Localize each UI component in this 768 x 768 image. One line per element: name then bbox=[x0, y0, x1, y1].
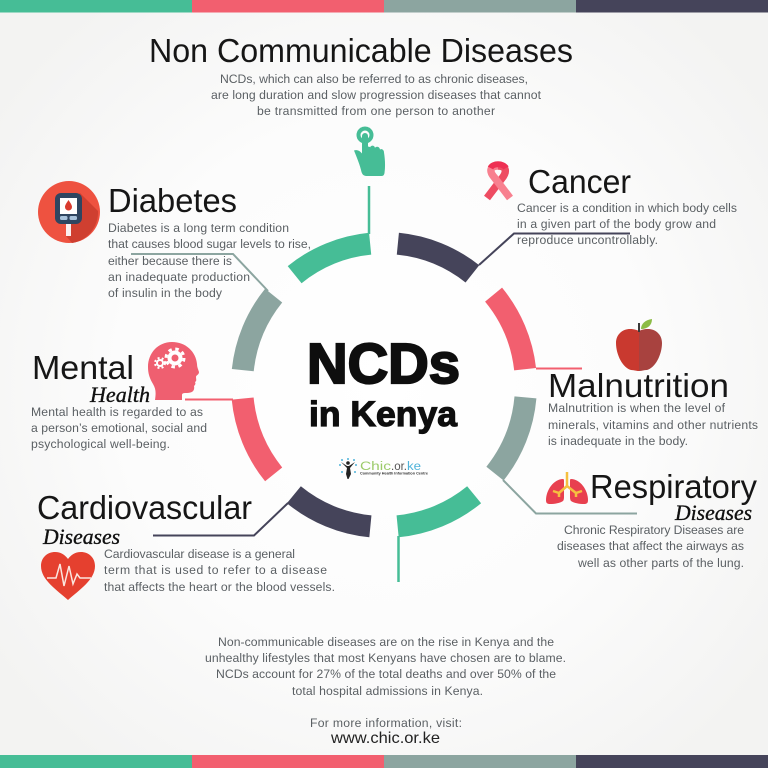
text: respiratory description bbox=[557, 523, 744, 570]
text: cardiovascular description: term that is used to refer to a disease bbox=[104, 563, 327, 577]
intro text: are long duration and slow progression diseases that cannot bbox=[211, 88, 542, 102]
website link text: www.chic.or.ke bbox=[330, 730, 440, 747]
logo: Chic.or.ke: .or. bbox=[391, 461, 407, 473]
text: cancer description bbox=[517, 201, 737, 247]
text: cardiovascular description: that affects the heart or the blood vessels. bbox=[104, 580, 335, 594]
heading: Malnutrition: Malnutrition bbox=[548, 367, 729, 404]
heading: Cancer: Cancer bbox=[528, 163, 631, 200]
title: Non Communicable Diseases bbox=[149, 32, 573, 69]
text: respiratory description: diseases that affect the airways as bbox=[557, 539, 744, 553]
text: mental health description bbox=[31, 405, 207, 451]
centre heading bbox=[307, 332, 460, 434]
text: diabetes description: an inadequate production bbox=[108, 270, 250, 284]
closing text: NCDs account for 27% of the total deaths and over 50% of the bbox=[216, 667, 556, 681]
connector lines bbox=[131, 186, 637, 582]
closing text: unhealthy lifestyles that most Kenyans have chosen are to blame. bbox=[205, 651, 566, 665]
text: respiratory description: Chronic Respiratory Diseases are bbox=[564, 523, 744, 537]
heading: Mental: Mental bbox=[32, 349, 134, 386]
text: respiratory description: well as other parts of the lung. bbox=[577, 556, 744, 570]
text: diabetes description: of insulin in the body bbox=[108, 286, 223, 300]
text: malnutrition description: Malnutrition is when the level of bbox=[548, 401, 726, 415]
icon: heart with pulse bbox=[41, 552, 95, 600]
icon: pointing hand bbox=[354, 128, 385, 176]
text: diabetes description: Diabetes is a long term condition bbox=[108, 221, 289, 235]
centre heading: NCDs bbox=[307, 332, 460, 396]
icon: ribbon bbox=[487, 164, 510, 198]
icon: lungs bbox=[546, 472, 588, 504]
panel: malnutrition bbox=[548, 319, 758, 448]
text: mental health description: a person’s emotional, social and bbox=[31, 421, 207, 435]
text: diabetes description: that causes blood sugar levels to rise, bbox=[108, 237, 311, 251]
text: cancer description: reproduce uncontrollably. bbox=[517, 233, 658, 247]
text: cancer description: Cancer is a condition in which body cells bbox=[517, 201, 737, 215]
text: diabetes description: either because there is bbox=[108, 254, 232, 268]
icon: apple bbox=[616, 319, 662, 371]
closing text: Non-communicable diseases are on the rise in Kenya and the bbox=[218, 635, 554, 649]
ring chart with six disease segments bbox=[184, 185, 584, 585]
panel: diabetes bbox=[38, 181, 311, 300]
icon: head with gears bbox=[148, 342, 199, 400]
heading: Respiratory: Respiratory bbox=[590, 468, 757, 505]
panel: respiratory bbox=[546, 468, 757, 570]
text: mental health description: psychological well-being. bbox=[31, 437, 170, 451]
script label: Diseases: Diseases bbox=[42, 524, 120, 549]
logo: Chic.or.ke: Community Health Information Centre bbox=[360, 472, 428, 476]
panel: cancer bbox=[487, 163, 737, 247]
website link text bbox=[310, 716, 462, 747]
script label: Health: Health bbox=[89, 382, 150, 407]
intro text: be transmitted from one person to another bbox=[257, 104, 495, 118]
top colour band bbox=[0, 0, 768, 12]
logo: Chic.or.ke bbox=[339, 458, 428, 479]
website link text: For more information, visit: bbox=[310, 716, 462, 730]
intro text: NCDs, which can also be referred to as chronic diseases, bbox=[220, 72, 528, 86]
bottom colour band bbox=[0, 755, 768, 768]
heading: Cardiovascular: Cardiovascular bbox=[37, 489, 252, 526]
intro text bbox=[211, 72, 542, 118]
text: diabetes description bbox=[108, 221, 311, 300]
text: cardiovascular description bbox=[104, 547, 335, 594]
script label: Diseases: Diseases bbox=[674, 500, 752, 525]
text: mental health description: Mental health is regarded to as bbox=[31, 405, 203, 419]
text: malnutrition description: minerals, vitamins and other nutrients bbox=[548, 418, 758, 432]
text: malnutrition description bbox=[548, 401, 758, 448]
heading: Diabetes: Diabetes bbox=[108, 182, 237, 219]
panel: mental health bbox=[31, 342, 207, 451]
centre heading: in Kenya bbox=[309, 395, 458, 434]
panel: cardiovascular bbox=[37, 489, 335, 600]
closing text: total hospital admissions in Kenya. bbox=[292, 684, 483, 698]
text: malnutrition description: is inadequate in the body. bbox=[548, 434, 688, 448]
icon: glucose meter bbox=[38, 181, 100, 243]
text: cardiovascular description: Cardiovascular disease is a general bbox=[104, 547, 295, 561]
logo: Chic.or.ke: Chic bbox=[360, 461, 391, 473]
closing text bbox=[205, 635, 566, 698]
logo: Chic.or.ke: ke bbox=[407, 461, 421, 473]
text: cancer description: in a given part of the body grow and bbox=[517, 217, 716, 231]
